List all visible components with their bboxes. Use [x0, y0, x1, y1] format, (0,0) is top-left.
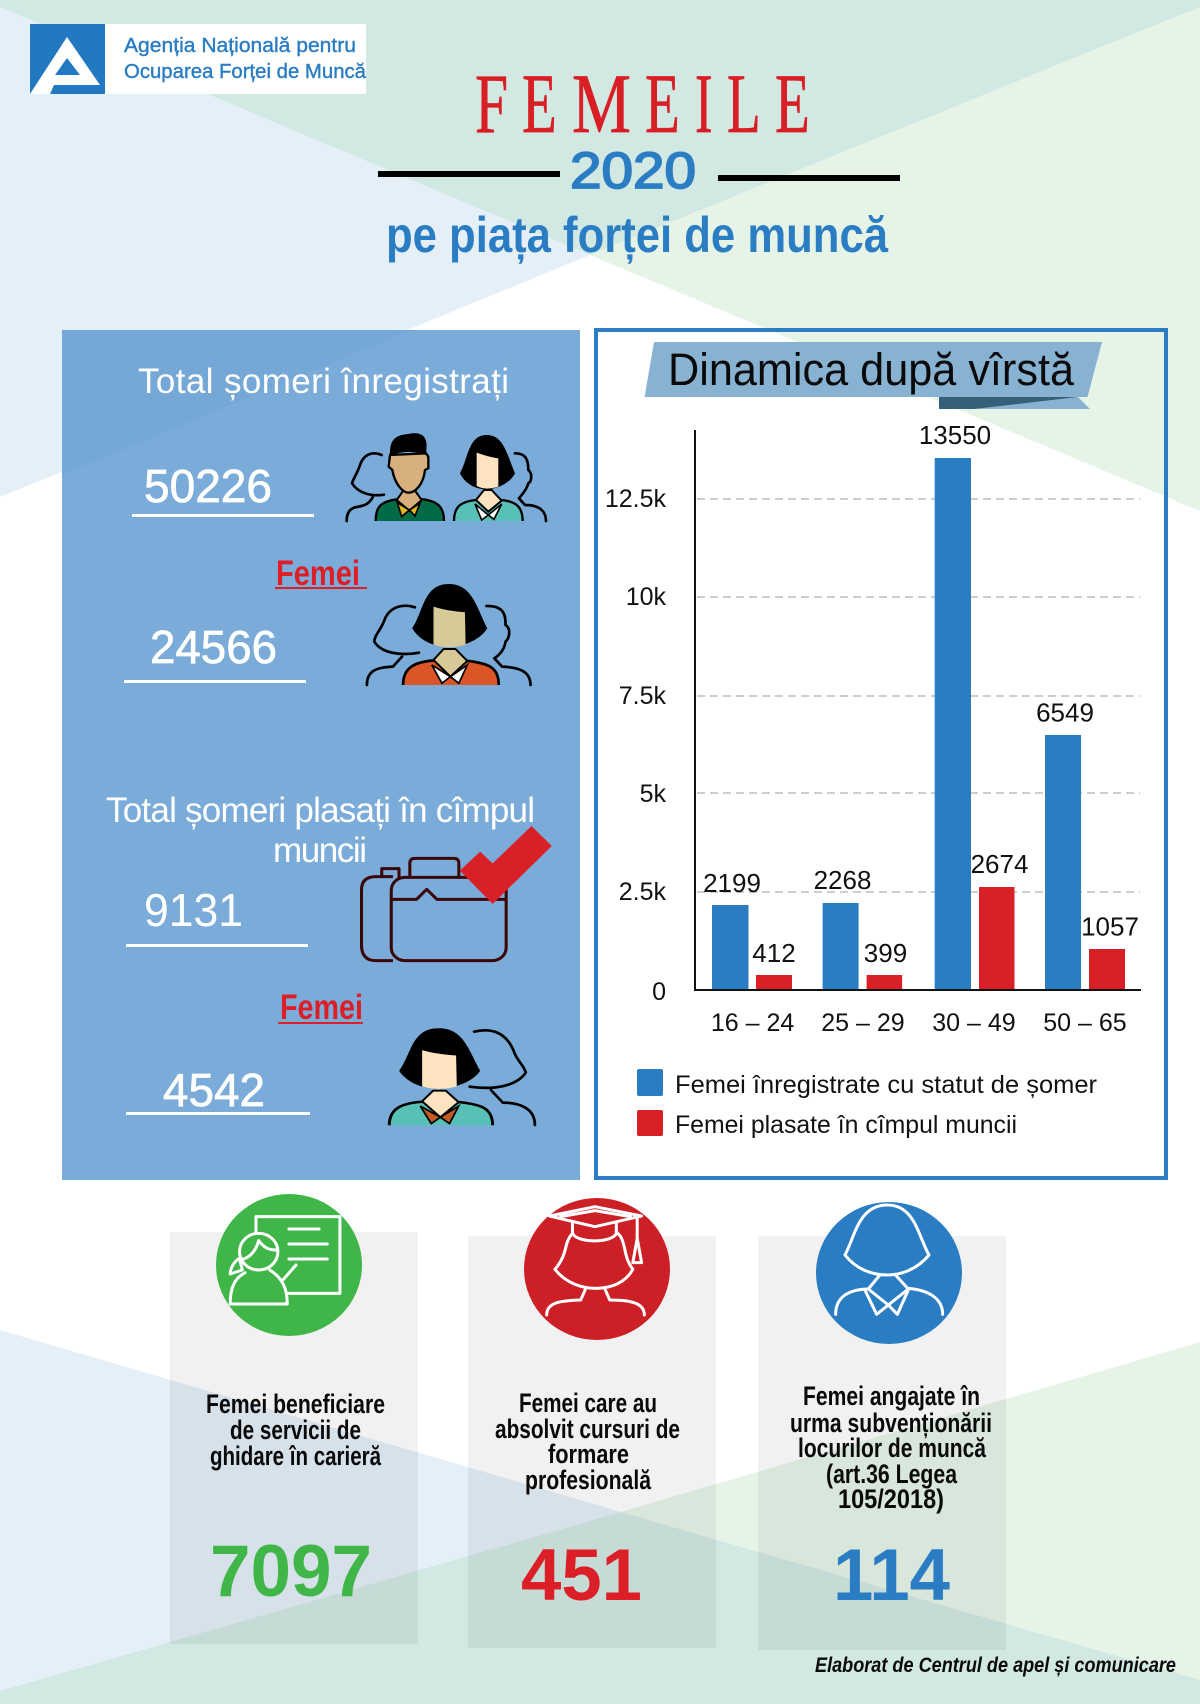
panel: age dynamics chart	[596, 330, 1166, 1178]
text: career guidance: Femei beneficiare	[206, 1389, 385, 1419]
number: placed women: 4542	[163, 1064, 265, 1116]
text: subsidised jobs	[790, 1381, 992, 1514]
heading: 2020 with side rules: 2020	[570, 142, 696, 199]
heading: total placed	[106, 791, 535, 870]
heading: total placed: muncii	[273, 831, 367, 870]
number: registered women	[124, 621, 306, 683]
y-axis labels: 2.5k	[619, 878, 666, 906]
number: 7097: 7097	[210, 1531, 372, 1612]
legend	[637, 1069, 1097, 1139]
icon: woman with teal top	[389, 1028, 535, 1125]
icon: woman with orange top	[367, 584, 530, 685]
title: FEMEILE: F	[475, 57, 508, 151]
bar value labels: 6549	[1036, 698, 1094, 728]
text: subsidised jobs: Femei angajate în	[803, 1381, 980, 1411]
text: vocational courses: Femei care au	[519, 1388, 657, 1418]
heading: total registered: Total șomeri înregistrați	[138, 362, 509, 401]
bar value labels: 412	[752, 938, 796, 968]
icon: graduate	[524, 1198, 670, 1340]
text: career guidance	[206, 1389, 385, 1471]
number: total placed	[126, 884, 308, 947]
title: FEMEILE: E	[645, 57, 680, 151]
y-axis labels: 10k	[626, 583, 666, 611]
x-axis labels: 30 – 49	[932, 1009, 1016, 1037]
text: career guidance: de servicii de	[230, 1415, 361, 1445]
number: registered women: 24566	[150, 621, 277, 673]
title: FEMEILE: E	[775, 57, 810, 151]
bar chart: bars by age group	[712, 458, 1125, 990]
x-axis labels: 16 – 24	[711, 1009, 794, 1037]
bar value labels: 2674	[971, 849, 1028, 879]
subtitle: pe piața forței de muncă	[386, 207, 889, 263]
card: subsidised jobs	[758, 1202, 1006, 1650]
label: Femei placed: Femei	[280, 988, 363, 1027]
y-axis labels: 7.5k	[619, 682, 666, 710]
title: FEMEILE: E	[522, 57, 557, 151]
title: FEMEILE: L	[727, 56, 761, 151]
logo: Agenția Națională pentru Ocuparea Forței de Muncă: Ocuparea Forței de Muncă	[124, 61, 367, 83]
number: total registered: 50226	[144, 460, 272, 512]
heading ribbon: Dinamica după vîrstă: Dinamica după vîrstă	[668, 344, 1075, 395]
text: subsidised jobs: 105/2018)	[838, 1484, 944, 1514]
title: FEMEILE	[475, 56, 810, 151]
icon: employed woman	[816, 1202, 962, 1344]
text: subsidised jobs: locurilor de muncă	[798, 1433, 987, 1463]
number: total registered	[132, 460, 314, 517]
number: 451: 451	[521, 1535, 642, 1616]
icon: teacher at board	[216, 1194, 362, 1336]
bar value labels: 399	[864, 938, 907, 968]
number: 114: 114	[833, 1535, 950, 1616]
label: Femei: Femei	[276, 554, 360, 593]
icon: briefcase with check mark	[361, 826, 552, 961]
panel: totals	[62, 330, 580, 1180]
y-axis labels: 5k	[640, 780, 666, 808]
x-axis labels: 50 – 65	[1043, 1009, 1127, 1037]
text: vocational courses: profesională	[525, 1465, 652, 1495]
number: placed women	[126, 1064, 310, 1116]
x-axis labels: 25 – 29	[821, 1009, 905, 1037]
logo: Agenția Națională pentru Ocuparea Forței de Muncă: Agenția Națională pentru	[124, 35, 356, 57]
card: vocational courses	[468, 1198, 716, 1648]
logo: Agenția Națională pentru Ocuparea Forței de Muncă	[30, 24, 367, 94]
heading: total placed: Total șomeri plasați în cîmpul	[106, 791, 535, 830]
title: FEMEILE: M	[572, 57, 631, 151]
bar value labels: 13550	[919, 420, 991, 450]
text: vocational courses: absolvit cursuri de	[495, 1414, 680, 1444]
y-axis labels: 0	[652, 978, 666, 1006]
text: vocational courses	[495, 1388, 680, 1495]
text: subsidised jobs: (art.36 Legea	[826, 1459, 958, 1489]
card: career guidance	[170, 1194, 418, 1644]
bar value labels: 2199	[703, 868, 761, 898]
bar value labels: 1057	[1081, 912, 1139, 942]
bar value labels: 2268	[814, 865, 871, 895]
number: total placed: 9131	[144, 884, 243, 936]
y-axis labels	[605, 485, 666, 1006]
bar value labels	[703, 420, 1139, 968]
text: subsidised jobs: urma subvenționării	[790, 1408, 992, 1438]
title: FEMEILE: I	[695, 57, 713, 151]
y-axis labels: 12.5k	[605, 485, 666, 513]
text: vocational courses: formare	[548, 1439, 629, 1469]
heading: 2020 with side rules	[378, 142, 900, 199]
text: career guidance: ghidare în carieră	[210, 1441, 382, 1471]
legend: Femei plasate în cîmpul muncii	[675, 1111, 1017, 1139]
legend: Femei înregistrate cu statut de șomer	[675, 1071, 1097, 1099]
icon: man and woman group	[347, 433, 546, 521]
x-axis labels	[711, 1009, 1127, 1037]
